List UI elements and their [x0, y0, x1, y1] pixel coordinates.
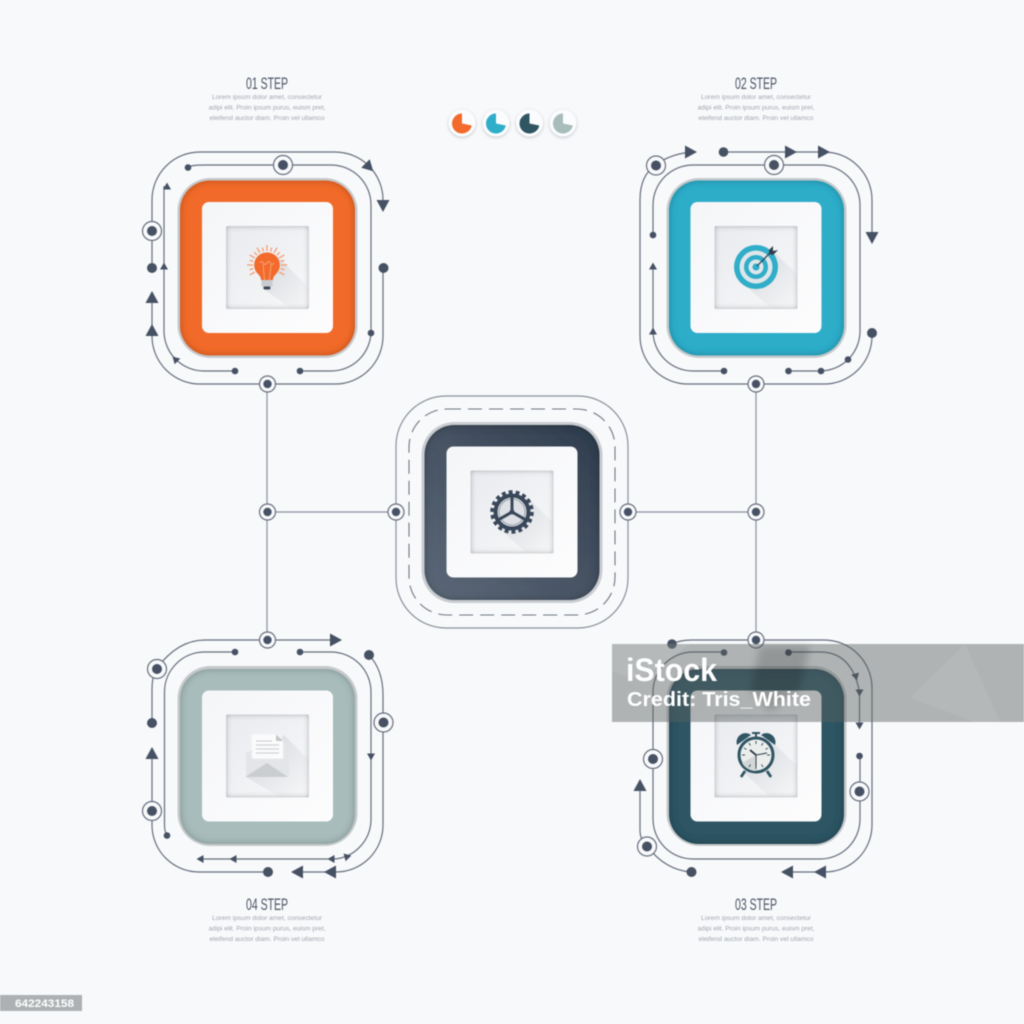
watermark banner: Credit: Tris_White [627, 689, 811, 711]
circuit: step 3 [634, 632, 872, 878]
panel: step 4 grey [178, 666, 358, 846]
circuit: step 1 [142, 152, 390, 392]
panel: step 1 orange [178, 178, 358, 358]
heading: 02 step: adipi elit. Proin ipsum purus, euism pret, [698, 104, 815, 112]
heading: 02 step: Lorem ipsum dolor amet, consectetur [701, 94, 812, 101]
centre outer frame [396, 396, 628, 628]
heading: 01 step: Lorem ipsum dolor amet, consectetur [212, 94, 323, 101]
watermark banner: iStock [626, 652, 717, 688]
heading: 02 step: eleifend auctor diam. Proin vel ullamco [698, 115, 814, 122]
heading: 02 step [698, 74, 815, 122]
heading: 04 step: eleifend auctor diam. Proin vel ullamco [210, 936, 325, 943]
image id tag: 642243158 [15, 998, 74, 1010]
centre dashed frame [409, 409, 615, 615]
heading: 01 step [208, 74, 326, 122]
icon: alarm clock [737, 733, 798, 797]
heading: 01 step: eleifend auctor diam. Proin vel ullamco [210, 115, 325, 122]
circuit: step 4 [142, 632, 393, 878]
heading: 02 step: 02 STEP [735, 74, 777, 93]
connector lines [267, 384, 756, 640]
heading: 03 step: 03 STEP [735, 895, 777, 914]
heading: 03 step: Lorem ipsum dolor amet, consectetur [701, 915, 812, 922]
circuit: step 2 [640, 146, 878, 392]
junction nodes [260, 504, 764, 520]
heading: 04 step: Lorem ipsum dolor amet, consectetur [212, 915, 323, 922]
panel: step 3 teal [666, 666, 846, 846]
heading: 03 step [698, 895, 815, 943]
icon: light bulb [247, 245, 309, 309]
image id tag [0, 995, 82, 1011]
panel: centre navy [396, 396, 628, 628]
heading: 01 step: 01 STEP [246, 74, 288, 93]
heading: 03 step: adipi elit. Proin ipsum purus, euism pret, [698, 926, 815, 932]
icon: gear [492, 492, 554, 553]
heading: 04 step: adipi elit. Proin ipsum purus, euism pret, [208, 926, 326, 932]
watermark banner [612, 644, 1024, 722]
legend: pie dots [448, 110, 576, 136]
heading: 04 step: 04 STEP [246, 895, 288, 914]
heading: 03 step: eleifend auctor diam. Proin vel ullamco [698, 936, 814, 943]
panel: step 2 blue [666, 178, 846, 358]
heading: 01 step: adipi elit. Proin ipsum purus, euism pret, [208, 104, 326, 112]
heading: 04 step [208, 895, 326, 943]
icon: envelope [245, 734, 309, 797]
icon: target [734, 245, 798, 309]
